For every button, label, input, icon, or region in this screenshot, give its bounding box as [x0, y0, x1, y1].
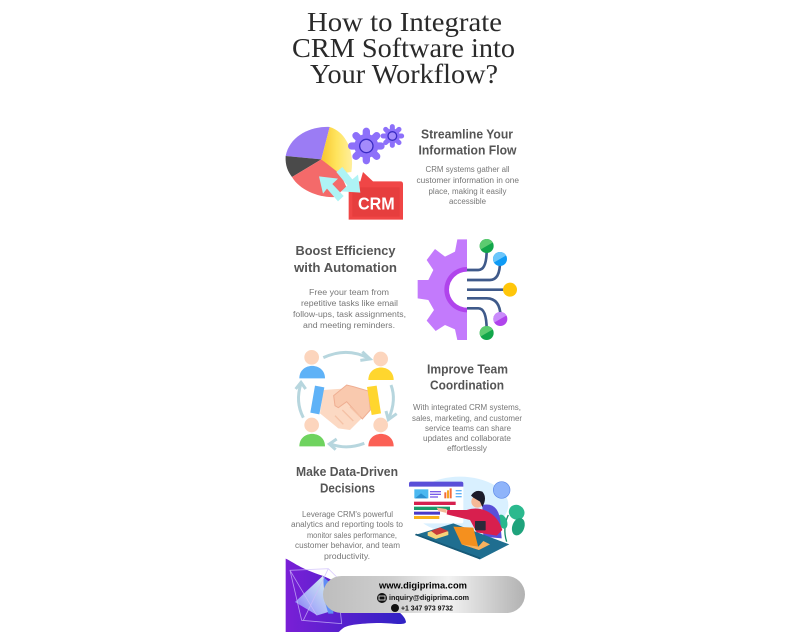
text block: customer information in one — [416, 176, 520, 185]
text block — [291, 510, 404, 561]
heading — [296, 465, 398, 496]
text block: and meeting reminders. — [303, 321, 395, 330]
text block — [293, 288, 406, 330]
text block — [412, 403, 522, 453]
panel: improve team coordination — [296, 350, 522, 453]
title: Your Workflow? — [310, 59, 498, 89]
text block: monitor sales performance, — [307, 531, 397, 540]
text block: place, making it easily — [428, 187, 506, 196]
title — [292, 7, 515, 89]
heading: Boost Efficiency — [296, 244, 396, 258]
icon: CRM pie chart and gears — [286, 127, 403, 220]
text block: sales, marketing, and customer — [412, 414, 522, 423]
text block: With integrated CRM systems, — [413, 403, 521, 412]
email with icon: inquiry@digiprima.com — [389, 593, 469, 602]
contact pill — [323, 576, 525, 613]
icon: CRM pie chart and gears: CRM — [358, 193, 395, 213]
text block: analytics and reporting tools to — [291, 520, 404, 529]
phone with icon: +1 347 973 9732 — [401, 604, 453, 612]
panel: data-driven decisions — [291, 465, 527, 561]
text block: Free your team from — [309, 288, 389, 297]
text block: CRM systems gather all — [426, 165, 510, 174]
text block: updates and collaborate — [423, 434, 512, 443]
title: How to Integrate — [307, 7, 502, 37]
text block: effortlessly — [447, 444, 487, 453]
icon: team handshake — [296, 350, 397, 450]
panel: streamline information flow — [286, 127, 520, 220]
heading: Decisions — [320, 482, 375, 496]
heading: Make Data-Driven — [296, 465, 398, 479]
heading: with Automation — [293, 261, 397, 275]
icon: half gear with circuit — [418, 236, 517, 340]
website: www.digiprima.com — [378, 580, 467, 592]
text block — [416, 165, 520, 206]
heading: Information Flow — [418, 144, 517, 158]
heading: Improve Team — [427, 362, 508, 376]
title: CRM Software into — [292, 33, 515, 63]
icon: analyst at desk with dashboard — [409, 477, 527, 559]
heading — [418, 128, 517, 158]
text block: Leverage CRM's powerful — [302, 510, 393, 519]
heading: Coordination — [430, 378, 504, 392]
heading — [293, 244, 397, 275]
text block: follow-ups, task assignments, — [293, 310, 406, 319]
footer decoration: purple blob with gem — [286, 559, 406, 632]
text block: accessible — [449, 197, 487, 206]
panel: boost efficiency — [293, 236, 517, 340]
text block: repetitive tasks like email — [301, 299, 398, 308]
heading: Streamline Your — [421, 128, 513, 142]
text block: customer behavior, and team — [295, 541, 400, 550]
heading — [427, 362, 508, 392]
text block: service teams can share — [425, 424, 512, 433]
text block: productivity. — [324, 552, 370, 561]
